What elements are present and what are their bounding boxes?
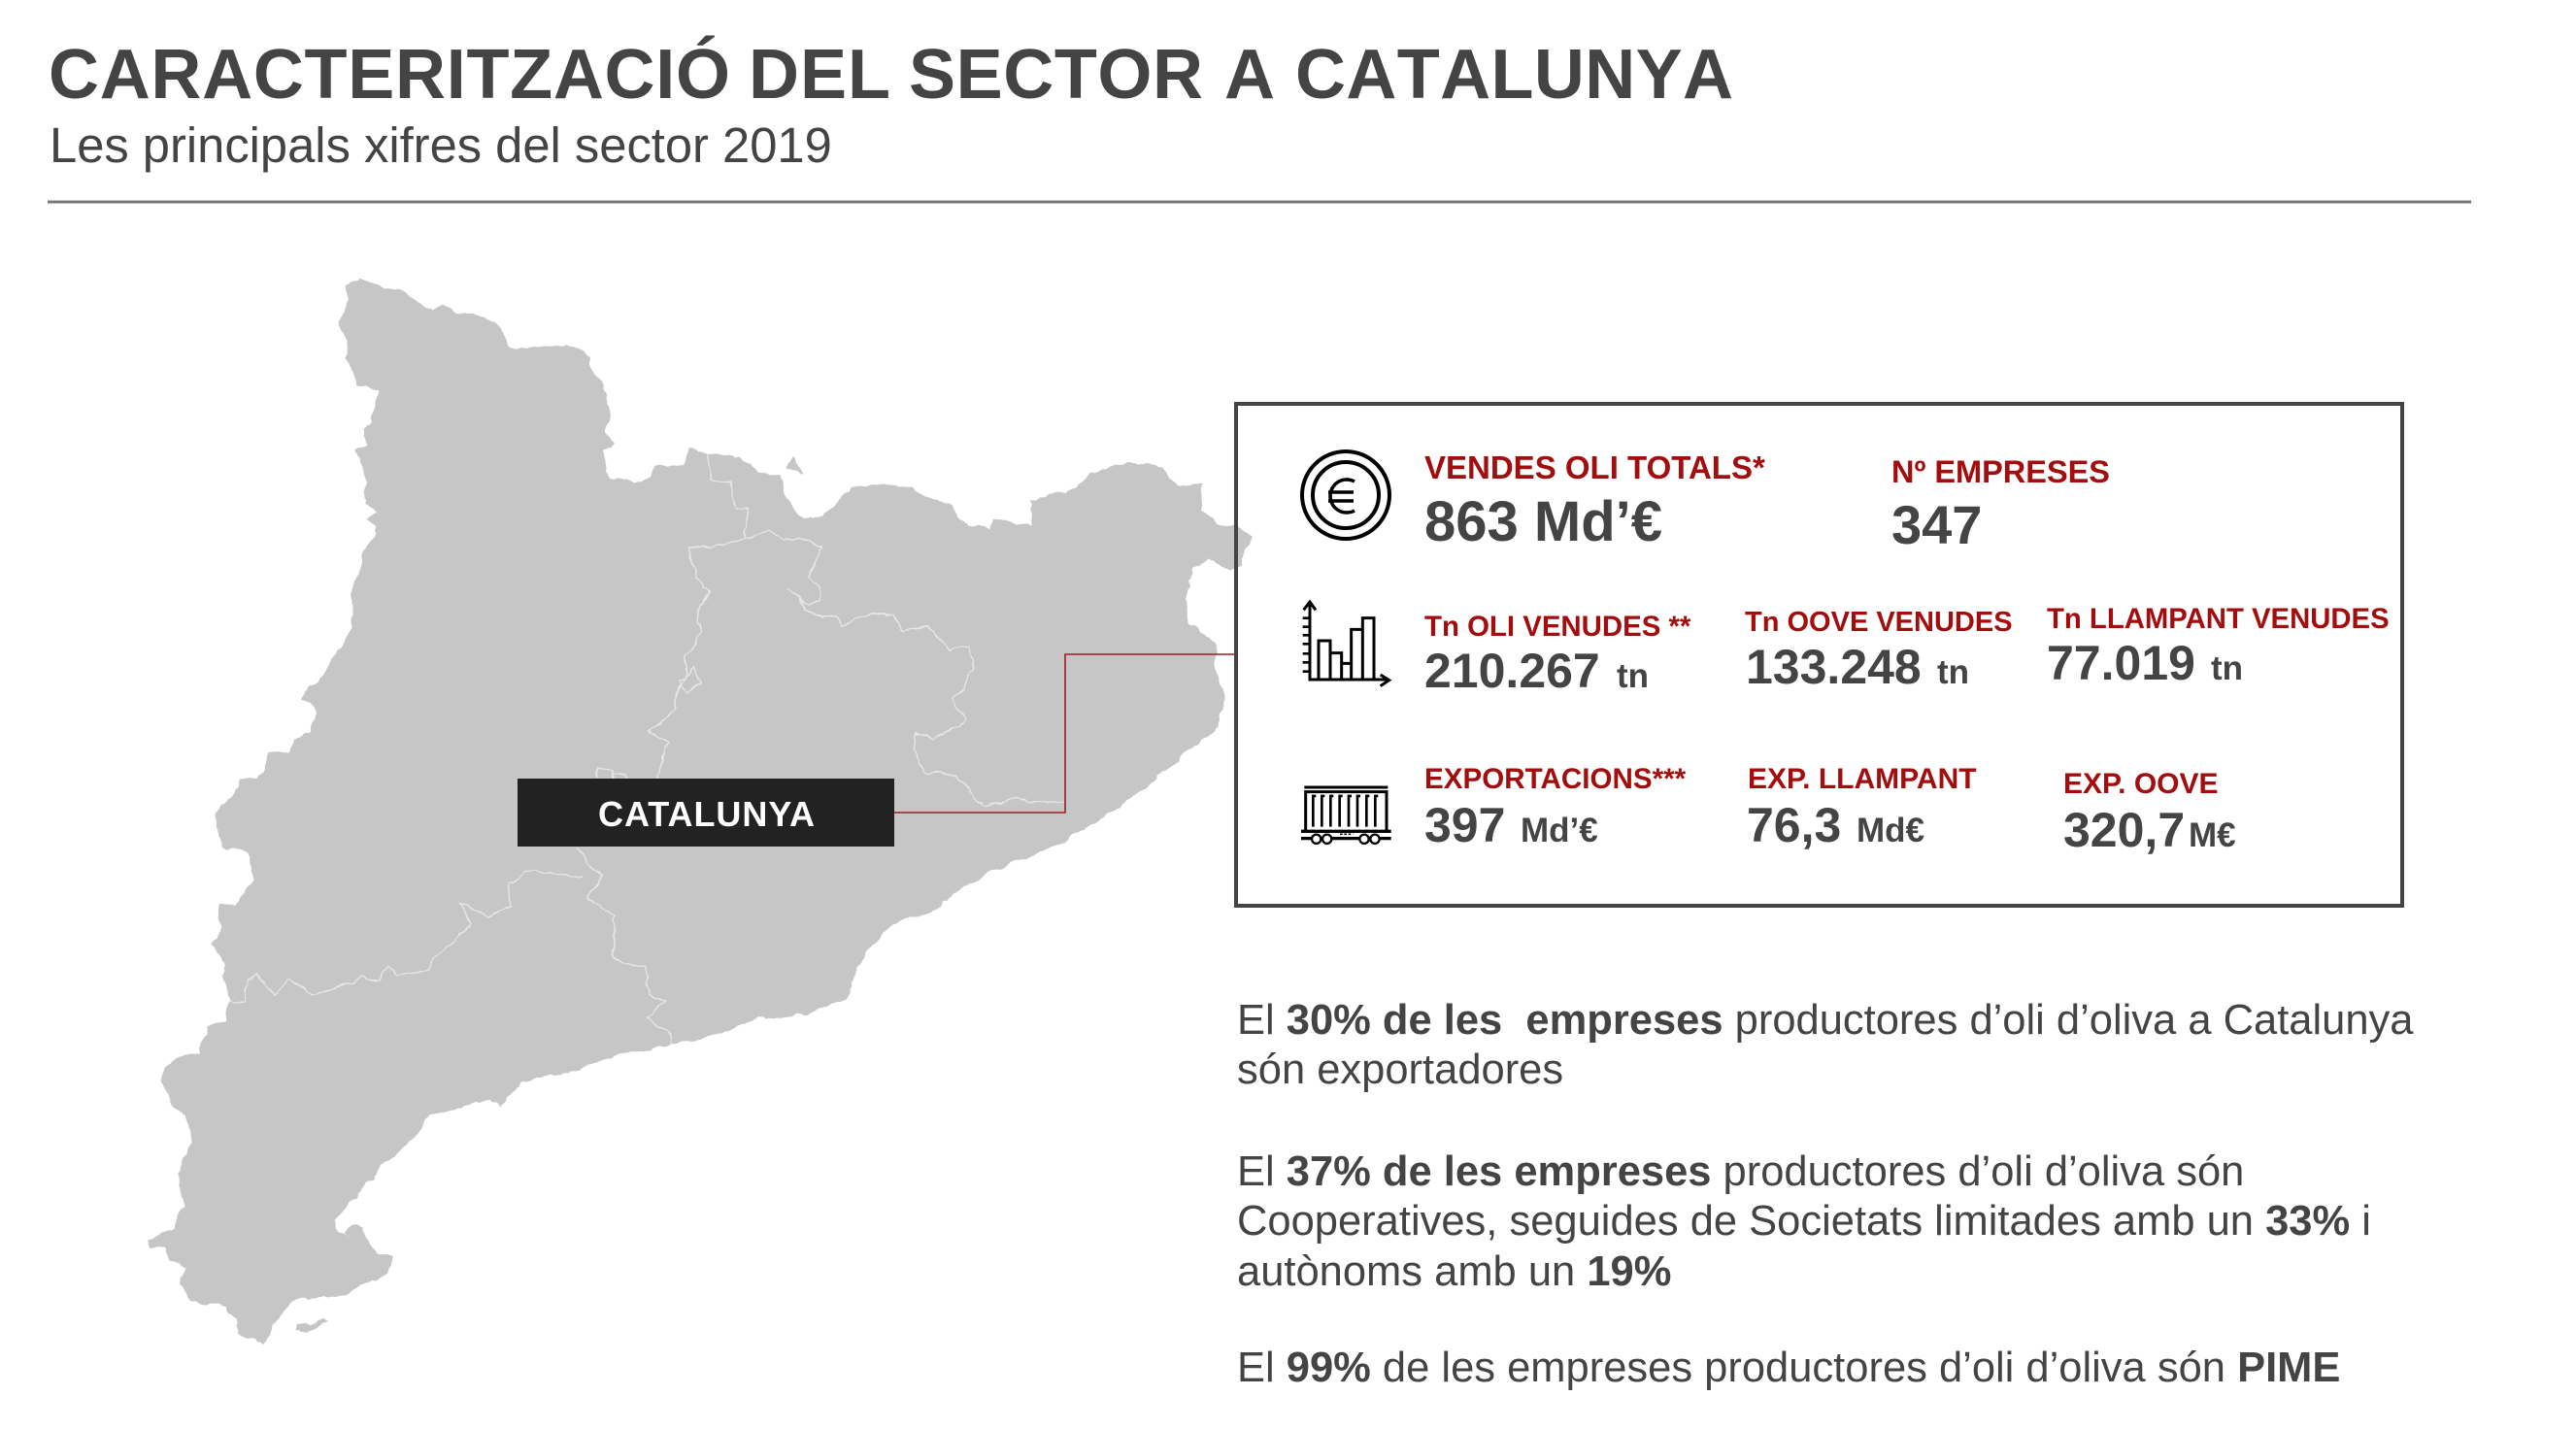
title xyxy=(49,35,1733,114)
map label: Catalunya: CATALUNYA xyxy=(598,794,815,834)
title: CATALUNYA xyxy=(1295,36,1733,114)
stat: exportacions oove: M€ xyxy=(2189,816,2236,854)
stat: vendes oli totals: VENDES OLI TOTALS* xyxy=(1424,449,1765,485)
stat: nombre d'empreses: Nº EMPRESES xyxy=(1891,454,2110,489)
stat: vendes oli totals: 863 Md’€ xyxy=(1424,490,1662,553)
stat: tn oli venudes: 210.267 xyxy=(1424,644,1600,698)
text block: PIME: El 99% de les empreses productores d’oli d’oliva són PIME xyxy=(1237,1345,2340,1391)
stat: tn llampant venudes: tn xyxy=(2211,649,2243,687)
stat: exportacions oove: EXP. OOVE xyxy=(2063,768,2219,800)
stat: exportacions: EXPORTACIONS*** xyxy=(1424,763,1687,795)
stat: vendes oli totals xyxy=(1424,449,1765,553)
key figures panel xyxy=(1236,404,2402,906)
stat: tn oli venudes xyxy=(1424,611,1691,698)
stat: exportacions llampant: 76,3 xyxy=(1747,798,1841,852)
stat: tn oli venudes: tn xyxy=(1617,657,1649,695)
text block: exportadores: El 30% de les empreses productores d’oli d’oliva a Catalunya xyxy=(1237,997,2414,1044)
stat: exportacions llampant: Md€ xyxy=(1857,812,1924,849)
icon: bar chart xyxy=(1303,602,1389,686)
stat: tn oove venudes xyxy=(1745,607,2013,694)
subtitle: Les principals xifres del sector 2019 xyxy=(50,117,832,173)
text block: exportadores: són exportadores xyxy=(1237,1047,1563,1093)
title: A xyxy=(1224,36,1275,114)
stat: tn llampant venudes xyxy=(2047,603,2390,690)
stat: tn llampant venudes: Tn LLAMPANT VENUDES xyxy=(2047,603,2390,635)
stat: tn llampant venudes: 77.019 xyxy=(2047,636,2195,690)
connector line xyxy=(894,654,1236,813)
text block: cooperatives xyxy=(1237,1148,2371,1295)
icon: euro coin xyxy=(1302,451,1389,539)
stat: tn oove venudes: tn xyxy=(1937,653,1969,691)
map of Catalonia xyxy=(147,278,1253,1346)
stat: exportacions xyxy=(1424,763,1687,852)
stat: exportacions llampant xyxy=(1747,763,1977,852)
stat: exportacions oove: 320,7 xyxy=(2063,803,2185,857)
text block: cooperatives: Cooperatives, seguides de Societats limitades amb un 33% i xyxy=(1237,1198,2371,1245)
icon: freight wagon xyxy=(1301,787,1391,844)
stat: exportacions: 397 xyxy=(1424,798,1505,852)
stat: exportacions: Md’€ xyxy=(1521,812,1598,849)
stat: exportacions oove xyxy=(2063,768,2236,857)
text block: cooperatives: El 37% de les empreses productores d’oli d’oliva són xyxy=(1237,1148,2244,1195)
title: CARACTERITZACIÓ xyxy=(49,35,730,114)
title: SECTOR xyxy=(909,36,1203,114)
stat: nombre d'empreses: 347 xyxy=(1891,494,1982,555)
text block: cooperatives: autònoms amb un 19% xyxy=(1237,1248,1671,1295)
stat: nombre d'empreses xyxy=(1891,454,2110,555)
stat: tn oove venudes: 133.248 xyxy=(1746,640,1922,694)
title: DEL xyxy=(749,36,890,114)
stat: exportacions llampant: EXP. LLAMPANT xyxy=(1748,763,1977,795)
stat: tn oli venudes: Tn OLI VENUDES ** xyxy=(1424,611,1691,643)
map label: Catalunya xyxy=(518,779,894,847)
text block: exportadores xyxy=(1237,997,2414,1093)
stat: tn oove venudes: Tn OOVE VENUDES xyxy=(1745,607,2013,638)
